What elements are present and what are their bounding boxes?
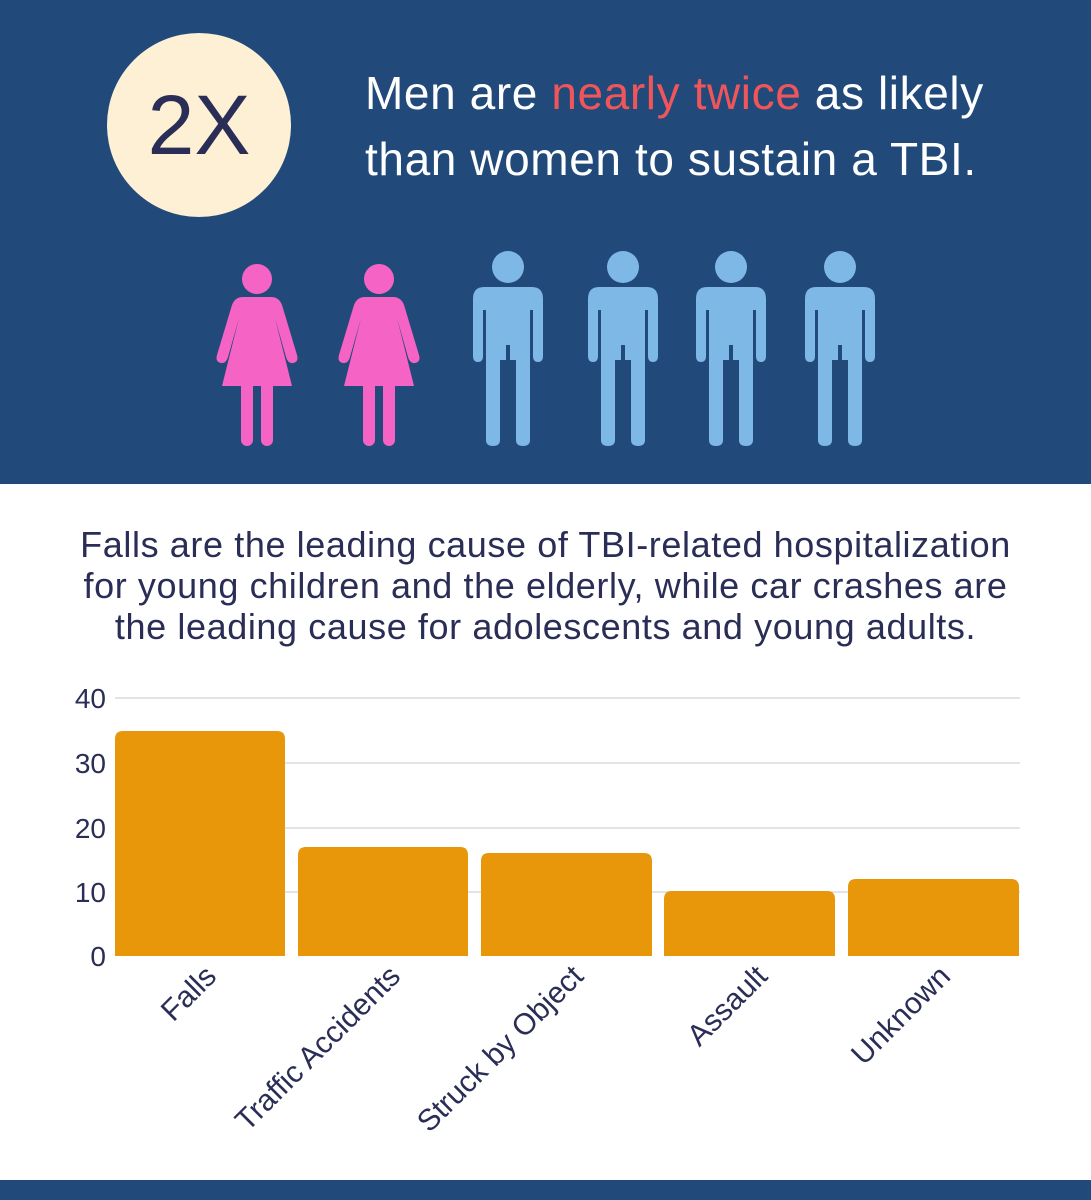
x axis labels: Traffic Accidents bbox=[229, 960, 407, 1137]
bar chart: causes bbox=[75, 683, 1020, 1139]
x axis labels: Assault bbox=[681, 959, 774, 1053]
x axis labels: Struck by Object bbox=[411, 959, 590, 1139]
text: causes paragraph bbox=[80, 524, 1011, 647]
panel: top gender stat bbox=[0, 0, 1091, 484]
y axis labels: 10 bbox=[75, 877, 106, 908]
icons: people bbox=[216, 251, 875, 446]
text: causes paragraph: Falls are the leading cause of TBI-related hospitalization bbox=[80, 524, 1011, 565]
circle: 2X bbox=[107, 33, 291, 217]
icon: woman 2 bbox=[338, 264, 420, 446]
y axis labels: 20 bbox=[75, 813, 106, 844]
bars bbox=[115, 731, 1019, 956]
y axis labels bbox=[75, 683, 106, 972]
text: causes paragraph: the leading cause for adolescents and young adults. bbox=[115, 606, 976, 647]
text: causes paragraph: for young children and the elderly, while car crashes are bbox=[83, 565, 1008, 606]
x axis labels: Unknown bbox=[845, 960, 957, 1071]
circle: 2X: 2X bbox=[148, 78, 250, 172]
headline: than women to sustain a TBI. bbox=[365, 133, 977, 185]
footer band bbox=[0, 1180, 1091, 1200]
y axis labels: 0 bbox=[90, 941, 106, 972]
x axis labels bbox=[155, 959, 957, 1139]
headline bbox=[365, 67, 984, 185]
icon: man 4 bbox=[805, 251, 875, 446]
x axis labels: Falls bbox=[155, 960, 223, 1028]
icon: man 2 bbox=[588, 251, 658, 446]
headline: Men are nearly twice as likely bbox=[365, 67, 984, 119]
y axis labels: 30 bbox=[75, 748, 106, 779]
icon: man 1 bbox=[473, 251, 543, 446]
y axis labels: 40 bbox=[75, 683, 106, 714]
icon: woman 1 bbox=[216, 264, 298, 446]
icon: man 3 bbox=[696, 251, 766, 446]
